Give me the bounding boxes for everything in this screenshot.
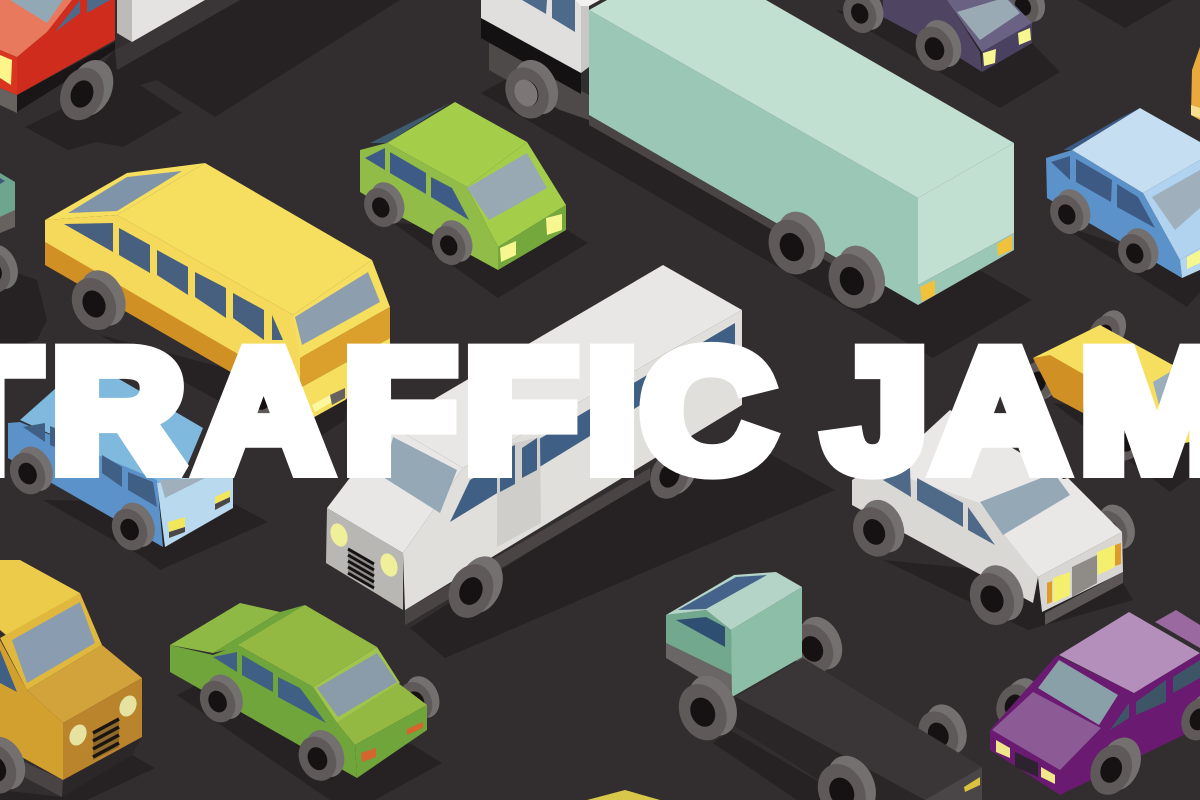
vehicle: yellow car, bottom left [0, 560, 142, 800]
vehicle: purple car [990, 610, 1200, 800]
vehicle: red car [0, 0, 121, 127]
vehicle: white trailer, top left [117, 0, 205, 42]
vehicle: flatbed truck [666, 572, 982, 800]
vehicle: yellow car behind title [1013, 306, 1200, 465]
vehicle: light blue van, right [1044, 108, 1200, 279]
vehicle: white bus [326, 265, 742, 625]
vehicle: yellow roof at bottom edge [587, 790, 660, 800]
vehicle: white van, right [845, 410, 1142, 632]
vehicle: orange car, right edge [1191, 47, 1200, 120]
vehicle: green car [170, 603, 446, 787]
truck underbody strip [115, 0, 240, 70]
vehicle: green van [358, 102, 566, 271]
vehicle: dark purple car [837, 0, 1051, 77]
vehicle: yellow bus [45, 163, 390, 429]
vehicle: grey-teal car, left edge [0, 173, 25, 298]
vehicle: blue van, left [3, 365, 233, 556]
vehicle: box truck with mint trailer [481, 0, 1014, 316]
